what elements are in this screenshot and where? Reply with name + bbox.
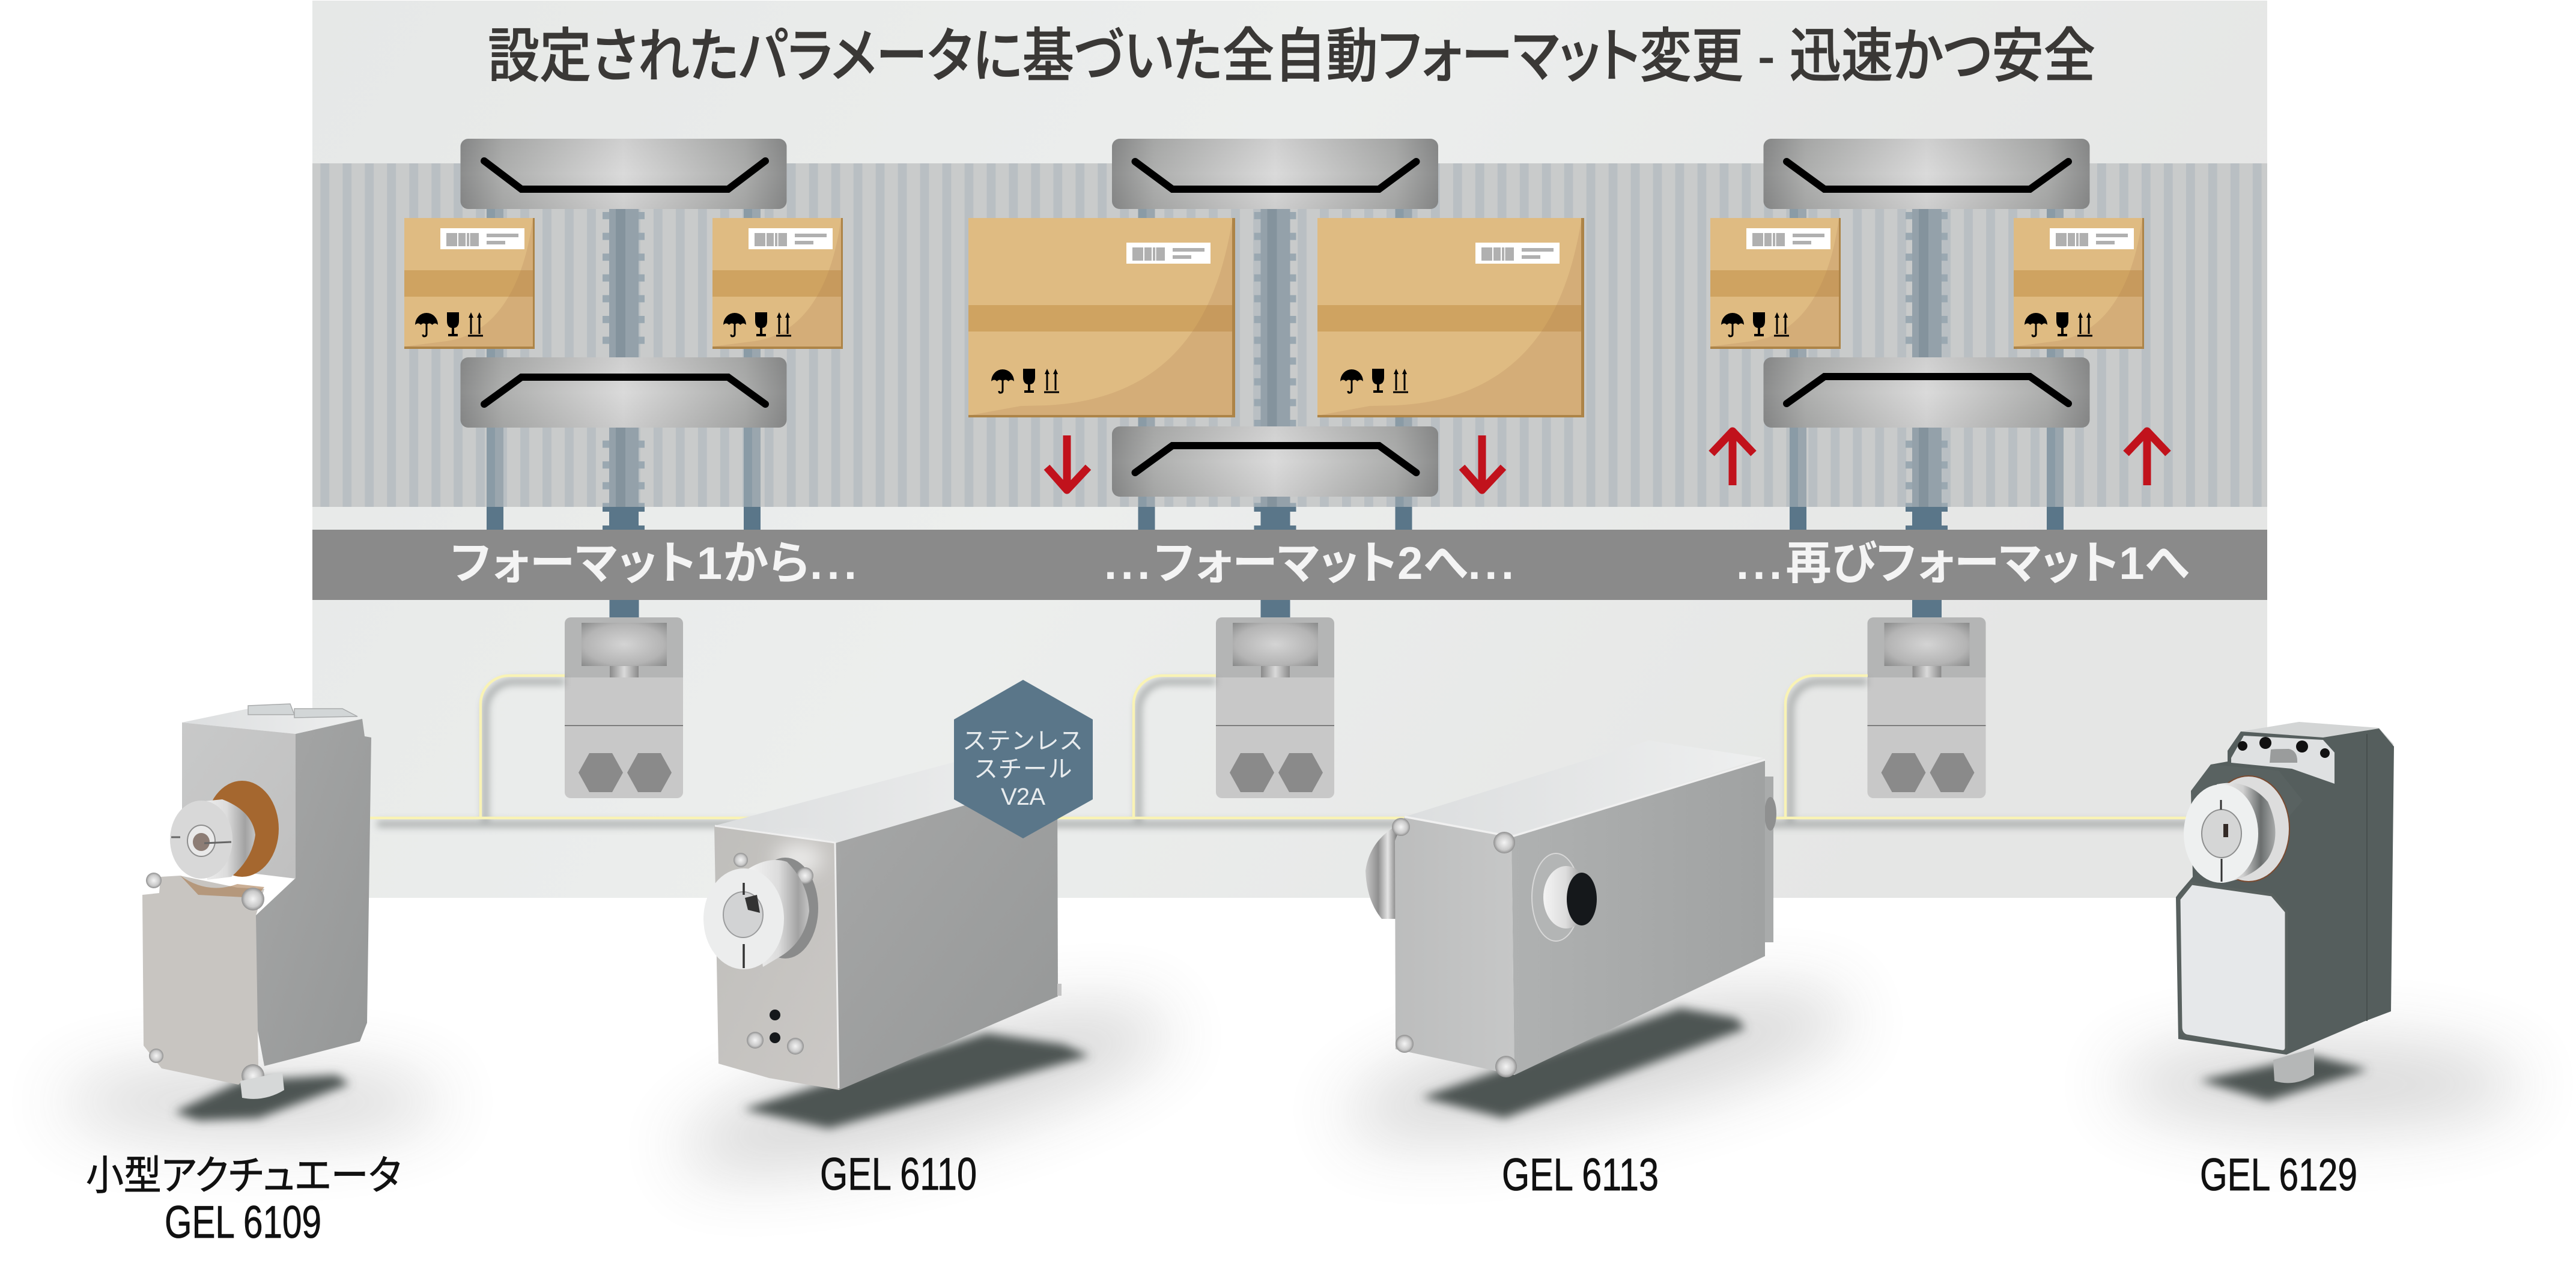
caption: GEL 6129: GEL 6129 <box>2200 1149 2357 1201</box>
guide rods and threaded spindle <box>1790 209 2064 530</box>
bar label 1: フォーマット1から... <box>451 538 860 589</box>
small box right <box>712 218 843 349</box>
tube port <box>1532 853 1597 941</box>
floor shadow <box>667 972 1183 1208</box>
large box right <box>1317 218 1584 417</box>
upper clamp <box>1764 139 2089 209</box>
station 2: format 2 clamps <box>968 139 1584 530</box>
yellow cable <box>360 676 2193 818</box>
striped machine backdrop <box>312 163 2267 507</box>
small box left <box>404 218 535 349</box>
arrow up right <box>2126 431 2168 485</box>
product: small actuator GEL 6109 <box>60 704 445 1139</box>
guide rods and threaded spindle <box>1138 209 1412 530</box>
dark body <box>2176 728 2394 1055</box>
actuator block station 3 <box>1867 600 1986 798</box>
caption: small actuator GEL 6109: 小型アクチュエータ <box>86 1153 401 1199</box>
white panel <box>2179 883 2286 1052</box>
housing <box>1395 740 1765 1075</box>
arrow up left <box>1712 431 1754 485</box>
connector <box>2273 1048 2314 1083</box>
screws <box>146 873 264 1087</box>
stainless steel hexagon badge: ステンレス <box>964 728 1082 754</box>
caption: small actuator GEL 6109: GEL 6109 <box>165 1197 321 1248</box>
guide rods and threaded spindle <box>487 209 761 530</box>
right tab and knob <box>1764 777 1776 942</box>
product: GEL 6129 dark housing <box>2115 722 2523 1129</box>
arrow down left <box>1046 435 1089 490</box>
large box left <box>968 218 1235 417</box>
connector <box>240 1072 284 1099</box>
screws <box>1392 818 1517 1077</box>
holes and screws <box>747 1010 804 1055</box>
lower clamp <box>1764 357 2089 428</box>
floor shadow <box>60 1065 445 1139</box>
caption: GEL 6110: GEL 6110 <box>820 1149 977 1200</box>
stainless steel hexagon badge: スチール <box>975 756 1072 783</box>
clamp collar <box>703 853 818 969</box>
arrow down right <box>1462 435 1503 490</box>
small box left <box>1710 218 1841 349</box>
grey label bar <box>312 530 2267 600</box>
brown flange and chrome clamp <box>170 781 279 880</box>
background panel <box>312 1 2267 898</box>
title: 設定されたパラメータに基づいた全自動フォーマット変更 - 迅速かつ安全 <box>488 23 2095 89</box>
actuator block station 2 <box>1216 600 1334 798</box>
station 3: back to format 1 clamps <box>1710 139 2168 530</box>
chrome clamp <box>2184 776 2289 883</box>
lower clamp <box>460 357 787 428</box>
bar label 2: ...フォーマット2へ... <box>1104 538 1517 589</box>
small box right <box>2014 218 2144 349</box>
lower clamp <box>1112 426 1438 497</box>
left chrome clamp <box>1365 825 1397 919</box>
upper clamp <box>460 139 787 209</box>
cable shadow <box>377 682 2192 824</box>
caption: small actuator GEL 6109 <box>86 1153 401 1248</box>
top face <box>2241 722 2394 745</box>
stainless steel hexagon badge: V2A <box>1001 784 1045 810</box>
product: GEL 6110 stainless <box>667 739 1183 1208</box>
product: GEL 6113 <box>1334 740 1862 1172</box>
floor shadow <box>2115 1039 2523 1129</box>
floor shadow <box>1334 960 1862 1172</box>
stainless steel hexagon badge <box>954 680 1093 838</box>
housing <box>142 704 371 1085</box>
station 1: format 1 clamps <box>404 139 843 530</box>
upper clamp <box>1112 139 1438 209</box>
seam and top plate <box>2191 734 2367 1021</box>
actuator block station 1 <box>565 600 683 798</box>
housing <box>714 739 1062 1090</box>
caption: GEL 6113: GEL 6113 <box>1502 1149 1659 1201</box>
bar label 3: ...再びフォーマット1へ <box>1736 538 2189 589</box>
